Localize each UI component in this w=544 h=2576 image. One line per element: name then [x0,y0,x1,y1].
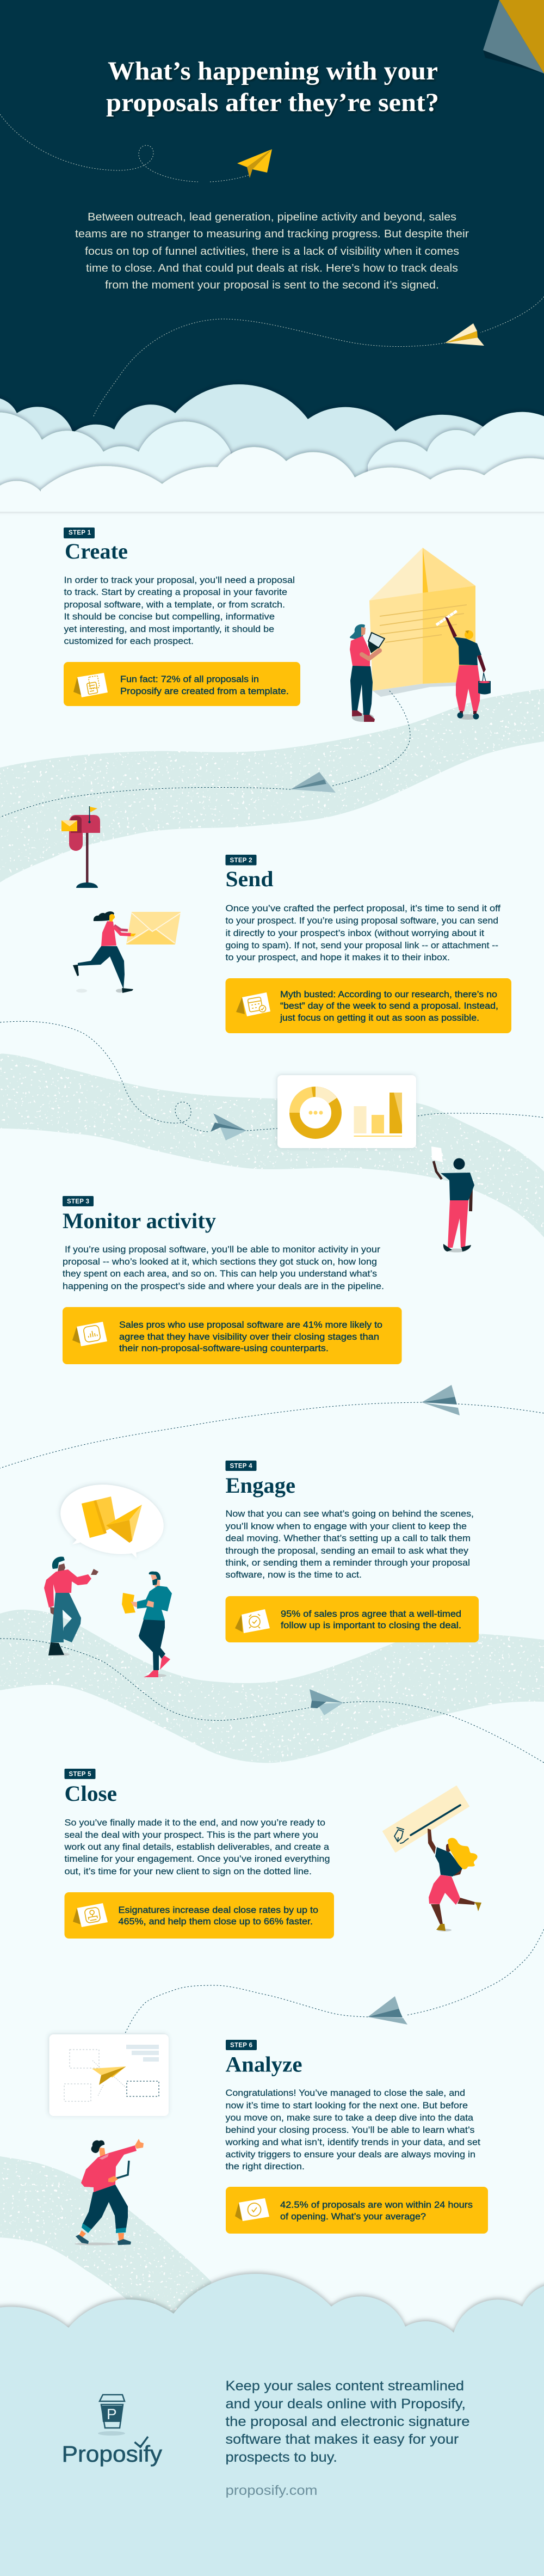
callout: esignature stat: Esignatures increase deal close rates by up to [119,1905,318,1915]
body text: it directly to your prospect’s inbox (without worrying about it [225,928,484,939]
man with paper [122,1572,172,1677]
body text: proposal software, with a template, or from scratch. [64,599,285,610]
body text: Congratulations! You’ve managed to close the sale, and [225,2088,465,2098]
icon: yellow paper plane [237,149,272,178]
call to action text: software that makes it easy for your [225,2432,459,2447]
callout: myth busted [225,978,511,1033]
step badge: STEP 4 [230,1463,252,1470]
icon: paper plane 4 [310,1689,343,1715]
chart card: analytics [277,1075,416,1148]
road band 1 [0,689,544,882]
body text: behind your closing process. You’ll be able to learn what’s [225,2125,474,2135]
panel: footer [0,2274,544,2576]
heading: Create [65,539,128,563]
icon: check card [235,2198,269,2221]
icon: paper plane 3 [422,1385,460,1415]
body text: out, it’s time for your new client to sign on the dotted line. [64,1866,312,1876]
callout: proposals won stat: 42.5% of proposals are won within 24 hours [280,2200,473,2210]
body text: working and what isn’t, identify trends in your data, and set [225,2137,480,2147]
folded paper corner [483,0,544,73]
heading: Engage [225,1473,295,1498]
step badge [64,528,95,538]
folded proposal [369,548,475,691]
body text: customized for each prospect. [64,636,194,646]
call to action text: and your deals online with Proposify, [225,2396,466,2412]
call to action text: the proposal and electronic signature [225,2414,470,2429]
body text: seal the deal with your prospect. This is the part where you [64,1830,318,1840]
dotted flight path to clouds [93,297,544,418]
callout: visibility stat: Sales pros who use proposal software are 41% more likely to [119,1320,382,1330]
panel: step 4 engage [44,1461,479,1677]
icon: mailbox [61,806,100,888]
step badge [226,2040,257,2050]
title: What’s happening with your [108,57,438,85]
panel: step 1 create [0,528,544,2576]
logo: Proposify: Proposify [62,2441,162,2467]
icon: clock card [235,1609,270,1633]
icon: cream paper plane [445,323,484,346]
dotted flight path 3 [0,1402,544,1468]
body text: happening on the prospect’s side and where your deals are in the pipeline. [63,1281,384,1291]
body text: the right direction. [225,2161,305,2172]
call to action text: prospects to buy. [225,2450,337,2465]
callout: myth busted: “best” day of the week to send a proposal. Instead, [280,1001,498,1011]
body text: to your prospect, and hope it makes it to their inbox. [225,952,450,962]
signature card [383,1786,469,1852]
body text: So you’ve finally made it to the end, and now you’re ready to [64,1817,325,1828]
callout: follow up stat [225,1596,479,1642]
body text: to track. Start by creating a proposal in your favorite [64,587,287,597]
heading: Send [225,867,273,891]
step badge: STEP 6 [230,2043,252,2049]
body text: timeline for your engagement. Once you’ve ironed everything [64,1854,330,1864]
dotted flight path 4 [0,1639,544,1763]
dotted flight path 1 [0,691,410,817]
bar chart [354,1093,402,1137]
intro text: focus on top of funnel activities, there is a lack of visibility when it comes [85,245,459,257]
icon: chart card [72,1322,107,1346]
panel: step 5 close [64,1769,481,1939]
callout: fun fact: Proposify are created from a template. [120,686,289,696]
donut chart [295,1092,336,1133]
panel: step 6 analyze [49,2034,488,2245]
title [106,57,439,117]
callout: follow up stat: 95% of sales pros agree that a well-timed [281,1609,461,1619]
body text [64,1817,330,1876]
callout: fun fact [64,662,300,706]
step badge [63,1196,94,1206]
step badge: STEP 2 [230,857,252,864]
step badge [225,855,257,866]
body text [225,903,500,962]
heading: Monitor activity [63,1209,216,1233]
body text [64,575,295,646]
step badge: STEP 1 [69,530,91,536]
step badge [225,1461,257,1471]
body text: to your prospect. If you’re using proposal software, you can send [225,916,498,925]
callout: proposals won stat: of opening. What’s your average? [280,2212,426,2222]
heading: Close [64,1781,117,1806]
body text: Once you’ve crafted the perfect proposal, it’s time to send it off [225,903,500,913]
person with ruler and bucket [436,611,491,720]
body text: you move on, make sure to take a deep dive into the data [225,2112,474,2123]
dotted flight path 5 [125,1929,544,2033]
intro text: teams are no stranger to measuring and tracking progress. But despite their [75,228,469,240]
intro text [75,211,469,291]
dotted flight path 2 with loop [0,1021,544,1132]
callout: visibility stat: their non-proposal-software-using counterparts. [119,1344,329,1353]
illustration: woman holding signature line [383,1786,481,1931]
website url: proposify.com [225,2483,318,2498]
body text: activity triggers to ensure your deals are always moving in [225,2149,475,2160]
icon: calendar card [236,992,270,1016]
callout: proposals won stat [226,2187,488,2234]
call to action text: Keep your sales content streamlined [225,2378,464,2394]
hero background [0,0,544,490]
call to action text [225,2378,470,2465]
body text [225,1508,474,1580]
title: proposals after they’re sent? [106,88,439,117]
body text: going to spam). If not, send your proposal link -- or attachment -- [225,940,498,950]
body text: It should be concise but compelling, informative [64,611,275,622]
icon: document and plane [82,1496,142,1543]
step badge: STEP 5 [69,1771,91,1778]
intro text: from the moment your proposal is sent to the second it’s signed. [105,279,439,291]
illustration: two people talking [44,1557,172,1677]
illustration: speech bubble with proposal [54,1475,170,1563]
illustration: giant proposal with two people [350,548,491,722]
body text: proposal -- who’s looked at it, which sections they got stuck on, how long [63,1256,377,1267]
body text: software, now is the time to act. [225,1569,362,1580]
body text: work out any final details, establish deliverables, and create a [64,1842,330,1852]
icon: paper plane 1 [290,772,336,793]
heading: Analyze [225,2052,302,2076]
road band 2 [0,1053,544,1237]
illustration: woman running with envelope [73,911,181,993]
icon: paper plane 2 [211,1113,246,1140]
proposal shadow [373,682,479,697]
body text: If you’re using proposal software, you’ll be able to monitor activity in your [65,1244,380,1254]
road band 3 [0,1610,544,1763]
footer cloud background [0,2274,544,2576]
panel: step 2 send [73,855,511,1033]
body text [225,2088,480,2172]
step badge [64,1769,96,1779]
callout: follow up stat: follow up is important to closing the deal. [281,1621,461,1630]
intro text: Between outreach, lead generation, pipeline activity and beyond, sales [88,211,456,223]
icon: paper plane in card [92,2066,126,2085]
illustration: person holding paper [431,1146,474,1252]
body text: In order to track your proposal, you’ll need a proposal [64,575,295,585]
woman talking [44,1557,98,1656]
logo: Proposify: P [107,2406,117,2422]
callout: visibility stat [63,1307,401,1364]
callout: myth busted: Myth busted: According to our research, there’s no [280,990,497,999]
illustration: analytics card [49,2034,169,2116]
body text: you’ll know when to engage with your client to keep the [225,1521,467,1531]
body text: now it’s time to start looking for the next one. But before [225,2100,468,2111]
body text: think, or sending them a reminder through your proposal [225,1557,470,1568]
clouds middle layer [0,412,544,506]
clouds front layer [0,447,544,512]
callout: myth busted: just focus on getting it out as soon as possible. [280,1013,479,1023]
intro text: time to close. And that could put deals at risk. Here’s how to track deals [86,262,458,274]
dotted flight path with loop [0,114,250,182]
step badge: STEP 3 [67,1199,89,1205]
logo: Proposify [62,2395,162,2467]
callout: visibility stat: agree that they have visibility over their closing stages than [119,1332,379,1342]
panel: hero header [0,0,544,512]
panel: step 3 monitor activity [63,1196,401,1364]
road band 4 [0,2156,212,2319]
callout: esignature stat [64,1892,334,1939]
clouds back layer [0,384,544,506]
body text: through the proposal, sending an email to ask what they [225,1545,469,1556]
body text: they spent on each area, and so on. This can help you understand what’s [63,1268,377,1279]
callout: esignature stat: 465%, and help them close up to 66% faster. [119,1917,313,1927]
woman figure [428,1829,481,1931]
icon: stamp card [73,1903,108,1927]
callout: fun fact: Fun fact: 72% of all proposals in [120,674,259,684]
body text: Now that you can see what’s going on behind the scenes, [225,1508,474,1519]
icon: paper plane 5 [368,1996,407,2025]
body text: deal moving. Whether that’s setting up a call to talk them [225,1533,471,1543]
illustration: man with laptop and thumbs up [75,2139,144,2245]
person with laptop [350,624,385,722]
icon: template card [73,673,108,697]
body text [63,1244,384,1291]
body text: yet interesting, and most importantly, it should be [64,624,274,634]
